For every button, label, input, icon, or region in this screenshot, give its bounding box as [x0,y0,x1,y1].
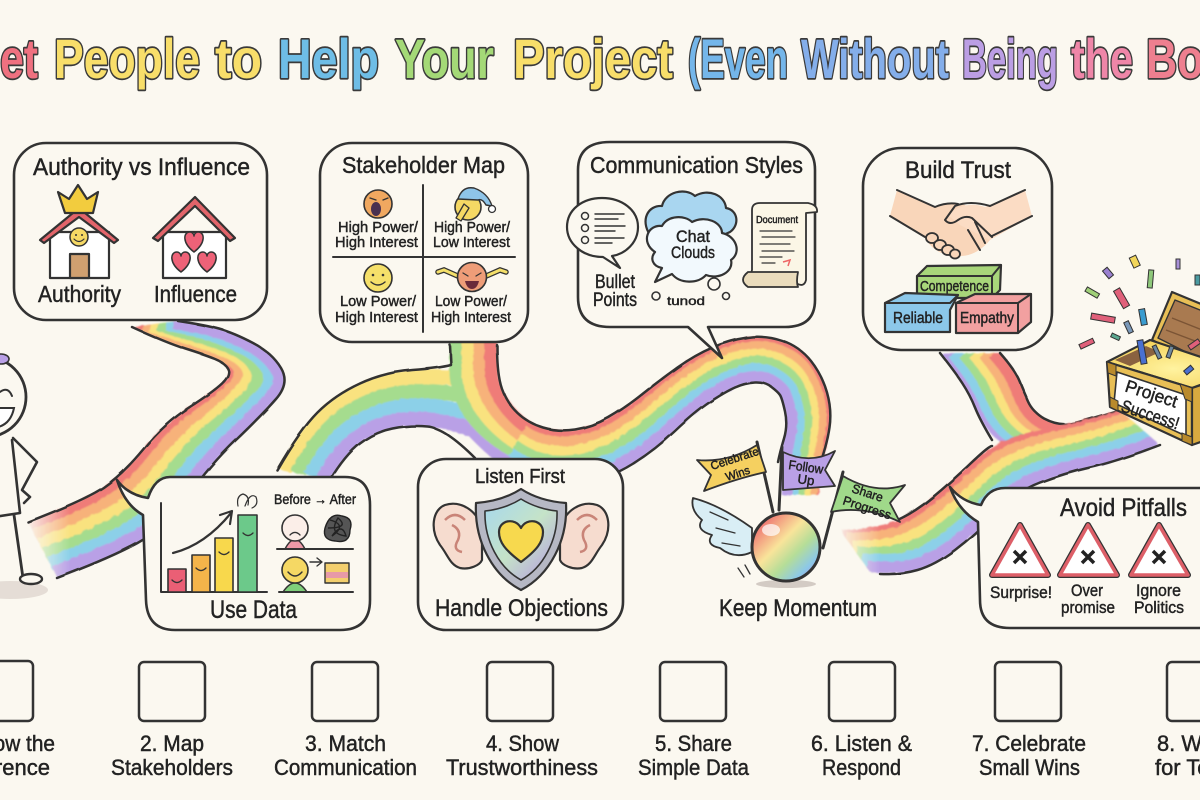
title: (Even [688,27,788,90]
labels: pitfalls: promise [1061,598,1115,617]
keep momentum group [692,442,905,622]
flag: celebrate wins [697,442,773,512]
step 7: celebrate small wins: 7. Celebrate [972,731,1086,756]
rainbow path: toward chest [842,413,1160,574]
label: bullet points: Bullet [595,272,636,293]
flag: follow up [779,447,835,510]
flag: share progress: Share [850,482,885,505]
icon: handshake [890,190,1032,258]
panel: use data [117,477,370,630]
quadrant dividers [333,185,515,332]
icon: warning over promise [1060,525,1117,575]
quadrant: high power low interest [433,188,511,251]
quadrant: high power high interest [335,190,419,251]
before and after: Before → After [274,492,356,507]
flag: celebrate wins: Wins [724,465,752,484]
step 3: match communication: 3. Match [305,731,386,756]
title: Being [962,27,1058,90]
heading: build trust: Build Trust [905,157,1011,184]
labels: pitfalls [990,581,1184,617]
icon: chat clouds: tunod [667,294,705,308]
before and after [274,492,356,592]
heading: stakeholder map: Stakeholder Map [342,152,505,178]
quadrant: low power high interest right [431,262,512,326]
rainbow path: Build Trust branch [938,352,1118,442]
title: Your [395,27,494,90]
panel: stakeholder map [320,143,528,342]
label: listen first: Listen First [475,466,565,488]
heading: authority vs influence: Authority vs Influence [33,154,250,181]
icon: wing [692,498,752,577]
icon: chat clouds: Chat [676,227,710,246]
step 4: show trustworthiness: 4. Show [486,731,559,756]
quadrant: low power high interest left: Low Power/ [340,293,417,310]
step 5: share simple data: 5. Share [655,731,732,756]
flag: celebrate wins: Celebrate [709,446,760,473]
step 7: celebrate small wins: Small Wins [979,755,1080,780]
flag: follow up: Follow [788,457,825,477]
icon: bullet speech bubble [567,198,638,268]
panel: handle objections [418,459,623,630]
title: People [54,27,200,90]
heading: handle objections: Handle Objections [435,595,608,622]
title: the [1071,27,1133,90]
step 4: show trustworthiness: Trustworthiness [446,755,598,780]
step 6: listen and respond [811,662,912,780]
step 5: share simple data [638,662,750,780]
icon: chat clouds: Clouds [671,243,715,262]
step 7: celebrate small wins [972,662,1086,780]
step 2: map stakeholders: Stakeholders [111,755,233,780]
panel: build trust [863,148,1052,350]
panel: communication styles [567,142,817,358]
icon: treasure chest: Project [1123,376,1180,412]
quadrant: low power high interest right: High Interest [431,309,512,326]
icon: treasure chest [1079,255,1200,445]
flag: share progress: Progress [841,494,893,522]
quadrant: low power high interest left: High Interest [335,309,419,326]
block: empathy [956,294,1031,333]
label: influence: Influence [154,281,237,307]
step 6: listen and respond: Respond [822,755,901,780]
panel: avoid pitfalls [950,487,1200,628]
block: reliable [885,293,958,332]
step 3: match communication [274,662,417,780]
icon: ears [434,504,608,568]
block: competence [917,265,1001,298]
title: Without [801,27,949,90]
step 8: clipped final step [1155,662,1200,780]
icon: authority house [40,185,118,278]
block: competence: Competence [920,279,989,295]
icon: document scroll [743,203,817,287]
step 2: map stakeholders: 2. Map [140,731,204,756]
label: authority: Authority [38,281,121,307]
labels: pitfalls: Politics [1134,598,1184,617]
heading: avoid pitfalls: Avoid Pitfalls [1060,494,1187,522]
quadrant: low power high interest left [335,264,419,326]
stick figure [0,354,48,599]
flag: share progress [823,472,905,548]
heading: keep momentum: Keep Momentum [719,595,877,622]
icon: shield with heart [476,489,566,590]
heading: use data: Use Data [210,596,297,624]
label: bullet points [593,272,637,311]
panel: authority vs influence [14,143,267,320]
icon: rainbow ball [752,513,820,588]
labels: pitfalls: Surprise! [990,583,1052,602]
step 3: match communication: Communication [274,755,417,780]
step 2: map stakeholders [111,662,233,780]
bar chart [161,494,267,592]
heading: communication styles: Communication Styles [590,152,803,178]
block: reliable: Reliable [893,310,943,327]
flag: follow up: Up [797,471,816,488]
step 6: listen and respond: 6. Listen & [811,731,912,756]
labels: pitfalls: Over [1071,581,1103,600]
step 5: share simple data: Simple Data [638,755,750,780]
label: bullet points: Points [593,290,637,311]
rainbow path: main wave [277,337,830,495]
quadrant: high power high interest: High Interest [335,234,419,251]
title [0,27,1200,90]
quadrant: high power low interest: Low Interest [433,234,511,251]
icon: chat clouds [646,191,737,308]
block: empathy: Empathy [960,310,1014,327]
labels: pitfalls: Ignore [1136,581,1181,600]
step 1: know the difference [0,661,55,780]
icon: influence house [153,197,235,278]
icon: warning surprise [992,525,1048,575]
title: Help [278,27,379,90]
icon: document scroll: Document [756,215,798,226]
icon: treasure chest: Success! [1119,396,1182,433]
quadrant: high power low interest: High Power/ [434,219,511,236]
confetti [1079,255,1200,375]
step 4: show trustworthiness [446,662,598,780]
quadrant: high power high interest: High Power/ [338,219,419,236]
icon: warning ignore politics [1131,525,1188,575]
rainbow path: figure to Authority [28,321,285,578]
title: to [215,27,262,90]
quadrant: low power high interest right: Low Power/ [435,293,508,310]
title: Project [513,27,673,90]
